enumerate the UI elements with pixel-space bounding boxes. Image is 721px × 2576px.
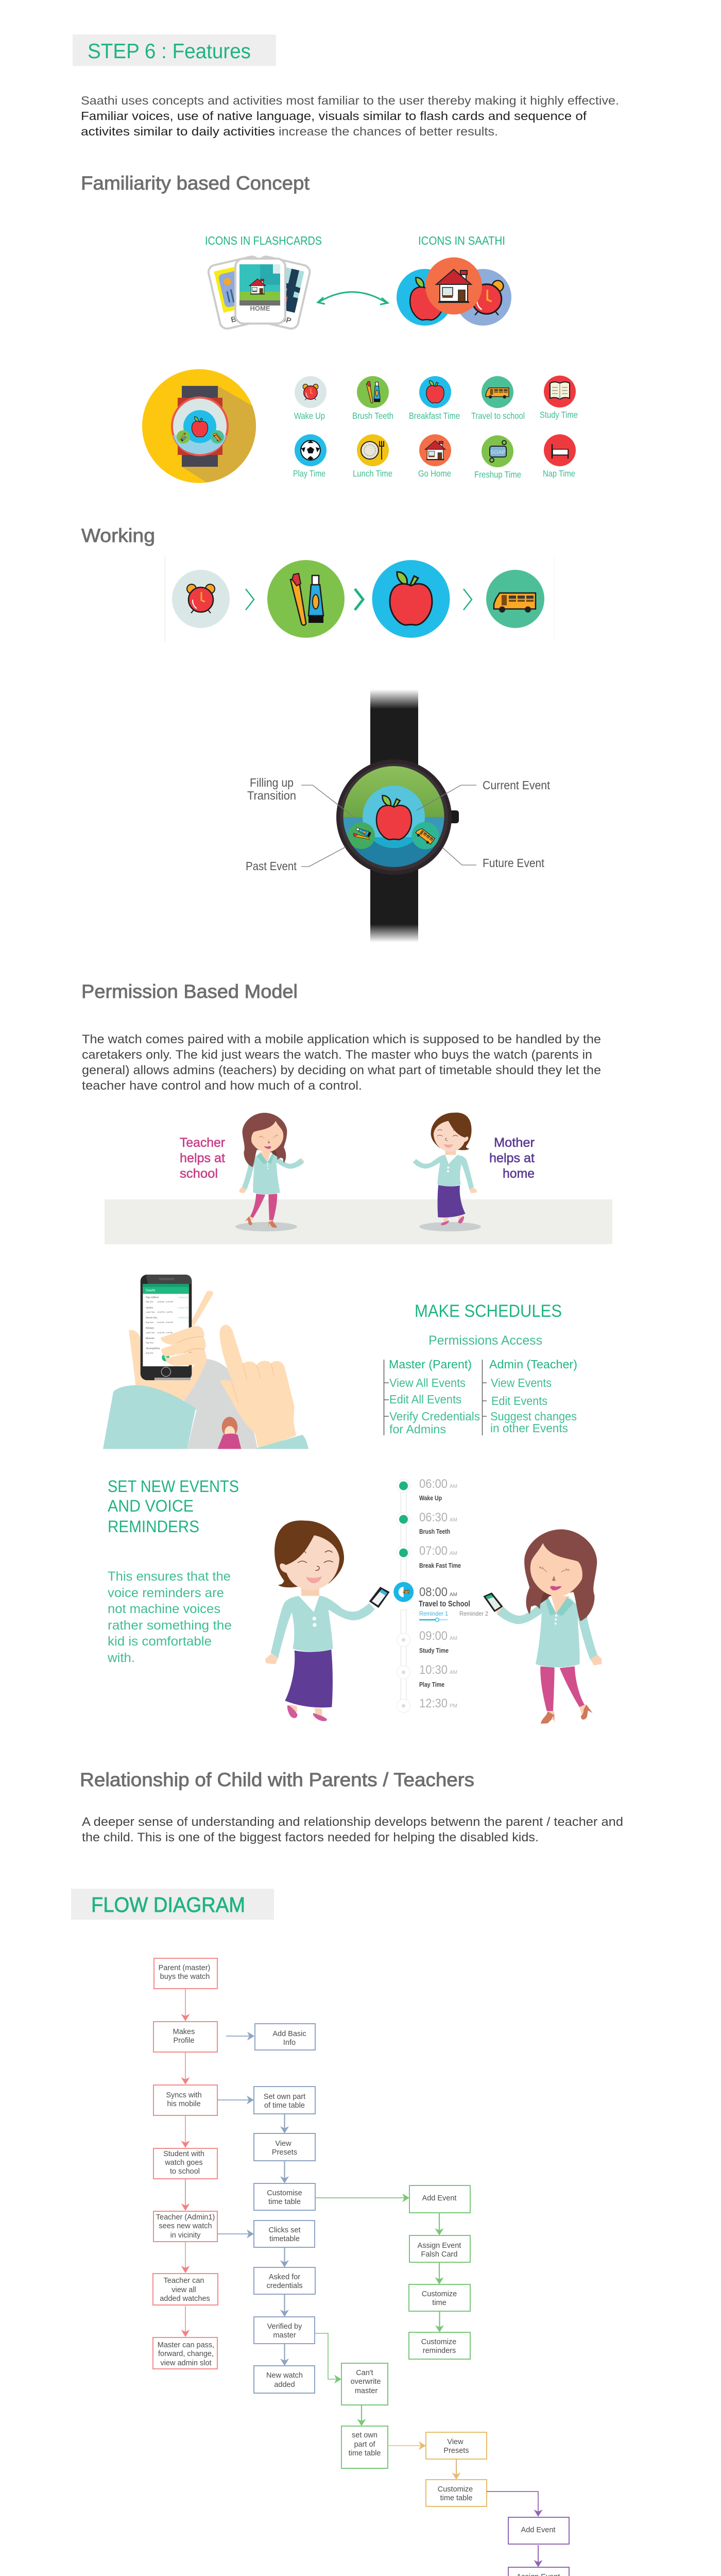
box: teacher views [153,2274,218,2305]
phone: Niranjan [146,1327,154,1329]
arrow [181,1989,190,2021]
box: set own part [341,2426,388,2468]
text: voice reminders explanation [107,1569,232,1665]
event: breakfast: AM [450,1551,457,1556]
intro paragraph [81,94,619,138]
phone: 12:00 PM - 1:00 PM [157,1311,173,1313]
label: teacher helps at school [180,1136,225,1181]
event: wake up: Wake Up [419,1495,442,1502]
label: icons in saathi: ICONS IN SAATHI [418,234,505,247]
box: set own part [254,2087,315,2114]
column: master: View All Events [389,1376,466,1389]
box: view presets [426,2432,487,2459]
box: assign event flash card: Assign Event [418,2242,461,2250]
box: customize reminders: Customize [421,2338,456,2346]
intro paragraph: Familiar voices, use of native language, visuals similar to flash cards and sequence of [81,109,587,123]
flow column: blue [218,2024,315,2393]
step: alarm clock [172,570,230,628]
box: parent buys: Parent (master) [159,1964,210,1972]
phone: Apurba [146,1306,153,1309]
box: add basic info [255,2024,315,2050]
box: parent buys [154,1958,217,1989]
smartwatch with callouts [246,689,551,942]
arrow [181,2052,190,2084]
callout: past event: Past Event [246,859,297,873]
flashcard: home: HOME [250,304,270,312]
phone: CONNECTED [178,1307,189,1309]
event: travel to school: Travel to School [419,1600,470,1608]
current node [393,1582,414,1602]
phone [141,1275,192,1380]
column: master [389,1358,480,1436]
intro paragraph: activites similar to daily activities [81,125,275,138]
box: set own part: part of [354,2441,376,2449]
chevron 2 [355,589,363,610]
arrow: makes profile to basic info [226,2032,254,2040]
step: brush teeth [267,560,345,638]
callout: filling up transition [247,776,296,802]
label: teacher helps at school: school [180,1166,218,1181]
icon: freshup time: Freshup Time [474,469,521,480]
text: voice reminders explanation: voice reminders are [108,1586,224,1600]
event: study time: Study Time [419,1647,449,1654]
event: wake up: AM [450,1484,457,1489]
icon: wake up [294,376,327,421]
event: travel to school [419,1585,488,1622]
phone: Bhasvati [146,1337,154,1340]
panel: teacher and mother [105,1112,612,1244]
rail [401,1486,406,1706]
text: voice reminders explanation: with. [107,1651,135,1665]
heading: set new events and voice reminders: SET NEW EVENTS [108,1477,239,1496]
arrow [435,2213,444,2235]
box: set own part: of time table [264,2102,305,2110]
event: travel to school: Reminder 2 [459,1610,488,1617]
icon: play time: Play Time [293,468,325,479]
callout: filling up transition: Transition [247,789,296,802]
box: new watch added: added [274,2381,295,2389]
left palm [129,1330,207,1400]
label: mother helps at home: Mother [494,1136,535,1150]
arrow: syncs to set own [218,2096,254,2104]
holding fingers [161,1291,213,1366]
label: mother helps at home: home [503,1166,535,1181]
box: customize time table: time table [440,2494,472,2502]
box: view presets: Presets [272,2148,297,2157]
column: master: Verify Credentials [389,1410,480,1423]
phone: 11:00 AM - 12:00 PM [157,1321,173,1324]
column: admin: in other Events [490,1421,568,1435]
box: asked for credentials [254,2267,315,2294]
relationship paragraph: the child. This is one of the biggest factors needed for helping the disabled kids. [82,1831,539,1844]
event: breakfast: 07:00 [419,1544,448,1558]
icon: brush teeth: Brush Teeth [352,411,393,421]
box: teacher sees: Teacher (Admin1) [156,2213,215,2222]
icon: lunch time: Lunch Time [353,468,392,479]
box: teacher views: view all [171,2286,196,2294]
arrow: customise to add event [315,2194,409,2202]
box: teacher views: Teacher can [164,2277,204,2285]
box: cant overwrite master: master [355,2387,377,2395]
box: cant overwrite master [341,2363,388,2405]
upcoming nodes [397,1633,410,1713]
arrow [181,2242,190,2273]
figure: mother with phone [265,1520,390,1721]
label: teacher helps at school: helps at [180,1151,225,1165]
icon: wake up: Wake Up [294,411,325,421]
arrow [181,2306,190,2337]
label: mother helps at home: helps at [489,1151,535,1165]
box: add event: Add Event [422,2194,456,2202]
icon: lunch time [353,434,392,479]
flow column: green master events [315,2185,470,2359]
event: 12:30: 12:30 [419,1697,448,1710]
heading: working: Working [81,525,155,546]
callout: current event: Current Event [483,778,551,792]
heading: set new events and voice reminders: AND VOICE [108,1497,194,1515]
icon: watch on yellow circle [142,369,256,483]
box: add event [508,2517,569,2544]
arrow [181,2179,190,2211]
arrow [280,2247,289,2267]
watch strap [370,689,418,942]
permission paragraph [82,1032,601,1093]
icon: nap time [543,434,576,479]
event: play time: Play Time [419,1681,444,1688]
phone: CONNECTED [178,1297,189,1299]
box: add basic info: Info [283,2039,296,2047]
box: makes profile: Profile [173,2037,195,2045]
box: set own part: set own [352,2431,377,2439]
flashcard: breakfast: BR [230,313,243,325]
event: study time: AM [450,1636,457,1641]
box: cant overwrite master: Can't [356,2369,373,2377]
event: breakfast [419,1544,461,1569]
event: brush teeth: Brush Teeth [419,1528,450,1535]
relationship paragraph [82,1815,623,1844]
left sleeve [103,1385,196,1449]
box: assign event flash card: Falsh Card [421,2250,457,2259]
box: clicks set timetable: Clicks set [268,2226,301,2234]
watch screen [340,766,448,868]
icon: brush teeth [352,376,393,421]
label: icons in flashcards: ICONS IN FLASHCARDS [205,234,322,247]
column: admin: Admin (Teacher) [489,1358,577,1371]
box: student: watch goes [164,2159,203,2167]
timeline [393,1477,488,1713]
watch crown [448,810,459,823]
event: play time: AM [450,1670,457,1675]
icon: breakfast time [409,376,460,421]
permission paragraph: caretakers only. The kid just wears the watch. The master who buys the watch (parents in [82,1048,592,1062]
box: syncs: Syncs with [166,2091,202,2099]
phone: Play Time [146,1321,153,1324]
icon: play time [293,434,327,479]
box: assign event flash card [409,2235,470,2262]
text: voice reminders explanation: not machine voices [108,1602,220,1616]
icon: travel to school: Travel to school [471,411,525,421]
phone: 12:00 PM - 1:00 PM [157,1332,173,1334]
box: clicks set timetable [254,2221,315,2247]
label: mother helps at home [489,1136,535,1181]
label: teacher helps at school: Teacher [180,1136,225,1150]
event: travel to school: AM [450,1592,457,1598]
heading: set new events and voice reminders [108,1477,239,1536]
box: set own part: Set own part [264,2093,305,2101]
flashcards illustration [207,255,311,330]
heading: permission based model: Permission Based Model [81,981,298,1002]
phone: Saathi [146,1289,156,1293]
event: brush teeth [419,1511,457,1535]
heading: relationship: Relationship of Child with Parents / Teachers [80,1769,474,1790]
step: apple [372,560,450,638]
relationship paragraph: A deeper sense of understanding and relationship develops betwenn the parent / teacher and [82,1815,623,1829]
flashcard: home [235,259,285,324]
event: travel to school: 08:00 [419,1585,448,1599]
phone: Play Time [146,1342,153,1344]
box: new watch added: New watch [266,2371,303,2380]
icon: travel to school [471,376,525,421]
callout: future event: Future Event [483,856,545,870]
arrow [280,2344,289,2366]
box: view presets: View [447,2438,464,2446]
box: teacher sees: in vicinity [170,2231,201,2240]
permission paragraph: teacher have control and how much of a control. [82,1079,362,1093]
box: view presets: Presets [443,2447,469,2455]
heading bar: flow diagram: FLOW DIAGRAM [91,1893,245,1917]
intro paragraph: increase the chances of better results. [279,125,498,138]
box: student: Student with [163,2150,204,2158]
box: clicks set timetable: timetable [269,2235,300,2243]
chevron 3 [464,589,472,610]
flow diagram [153,1958,569,2576]
step: school bus [486,570,544,628]
column: admin: Suggest changes [490,1410,577,1423]
arrow [388,2441,426,2450]
permission paragraph: The watch comes paired with a mobile application which is supposed to be handled by the [82,1032,601,1046]
figure: teacher with phone [483,1529,602,1724]
box: syncs: his mobile [167,2100,201,2108]
callout: filling up transition: Filling up [250,776,294,789]
box: makes profile: Makes [173,2028,195,2036]
box: teacher views: added watches [160,2295,210,2303]
box: verified by master: master [273,2331,296,2340]
box: parent buys: buys the watch [160,1973,210,1981]
box: teacher sees [153,2211,217,2242]
intro paragraph: Saathi uses concepts and activities most familiar to the user thereby making it highly effective. [81,94,619,107]
figure: teacher [239,1113,304,1228]
heading: make schedules: MAKE SCHEDULES [415,1301,562,1321]
icon grid: daily events [293,376,578,480]
figure: mother [413,1112,477,1225]
event: breakfast: Break Fast Time [419,1562,461,1569]
box: asked for credentials: Asked for [269,2273,300,2281]
column: master: for Admins [389,1422,446,1436]
icon: study time: Study Time [540,410,578,420]
phone: Lunch Time [146,1332,154,1334]
box: view presets: View [275,2140,291,2148]
heading bar: flow diagram [71,1889,274,1920]
box: customise time table: time table [268,2198,301,2206]
heading bar: step 6 [73,35,276,66]
box: add basic info: Add Basic [272,2030,306,2038]
watch case [336,759,452,875]
box: add event [409,2185,470,2213]
arrow [487,2492,543,2517]
box: master passes [153,2337,217,2369]
icon: double-headed arrow [318,292,388,304]
box: customise time table [254,2183,315,2210]
box: master passes: forward, change, [158,2350,214,2358]
box: master passes: view admin slot [160,2359,212,2367]
subheading: permissions access: Permissions Access [428,1333,542,1348]
arrow [181,2115,190,2148]
box: add event: Add Event [521,2526,555,2534]
flashcard: wake up [246,255,311,330]
flashcard: breakfast [207,255,272,330]
event: travel to school: Reminder 1 [419,1610,448,1617]
phone in mother's hand [369,1587,390,1608]
working sequence panel [165,556,554,641]
pointing hand [220,1325,296,1449]
box: syncs [153,2085,217,2115]
event: play time [419,1663,457,1688]
box: cant overwrite master: overwrite [351,2378,381,2386]
grey body [184,1359,258,1449]
icons in saathi illustration [397,258,511,326]
heading: set new events and voice reminders: REMINDERS [108,1517,199,1536]
text: voice reminders explanation: rather something the [108,1618,232,1633]
phone: Steven Dev [146,1316,158,1319]
heading: familiarity based concept: Familiarity based Concept [81,173,310,194]
teacher shadow [235,1222,297,1231]
arrow [452,2459,460,2480]
chevron 1 [246,589,254,610]
icon: study time [540,376,578,420]
box: verified by master: Verified by [267,2323,302,2331]
text: voice reminders explanation: kid is comfortable [108,1634,212,1649]
box: customize time table: Customize [438,2485,473,2494]
icon: breakfast time: Breakfast Time [409,411,460,421]
heading bar: step 6: STEP 6 : Features [88,39,251,63]
box: customize time [409,2284,470,2311]
box: customize time: Customize [422,2290,457,2298]
ground band [105,1199,612,1244]
phone: Play Time [146,1301,153,1303]
column: admin: Edit Events [491,1394,547,1408]
column: admin [489,1358,577,1435]
phone: Lunch Time [146,1311,154,1313]
box: makes profile [153,2022,217,2052]
box: customize reminders [409,2332,470,2359]
box: set own part: time table [349,2449,381,2458]
box: teacher sees: sees new watch [159,2222,212,2230]
box: new watch added [254,2366,315,2393]
arrow: teacher to clicks [218,2230,254,2238]
box: verified by master [254,2317,315,2344]
arrow [534,2545,543,2567]
callout lines [301,785,476,867]
permission paragraph: general) allows admins (teachers) by deciding on what part of timetable should they let the [82,1063,601,1077]
icon: nap time: Nap Time [543,468,575,479]
flow column: parent and teacher [153,1958,218,2369]
arrow [435,2312,444,2332]
icon: go home [418,434,451,479]
flow column: yellow [388,2432,487,2506]
phone: Play Time [146,1352,153,1354]
icon: freshup time: SOAP [490,449,506,455]
illustration: hands holding phone [103,1275,308,1449]
event: wake up: 06:00 [419,1477,448,1491]
box: customize time table [426,2480,487,2506]
arrow [280,2161,289,2183]
icon: go home: Go Home [418,468,451,479]
arrow [357,2405,366,2426]
column: admin: View Events [491,1376,552,1389]
arrow [435,2262,444,2284]
flashcard: wake up: UP [280,314,292,326]
box: master passes: Master can pass, [158,2341,214,2349]
flow column: purple [487,2492,569,2576]
arrow [280,2114,289,2133]
event: brush teeth: 06:30 [419,1511,448,1524]
column: master: Master (Parent) [389,1358,472,1371]
arrow: verified to cant overwrite [315,2333,341,2383]
event: play time: 10:30 [419,1663,448,1677]
box: asked for credentials: credentials [266,2282,303,2290]
flow column: green admin [315,2333,388,2468]
text: voice reminders explanation: This ensures that the [108,1569,231,1584]
phone: Himangshikha [146,1347,160,1350]
box: customize reminders: reminders [423,2347,456,2355]
small figure [218,1417,241,1449]
permissions table [384,1358,577,1436]
box: view presets [254,2133,315,2161]
phone in teacher's hand [483,1592,503,1612]
event: study time [419,1629,457,1654]
arrow [280,2294,289,2317]
event: 12:30: PM [450,1703,457,1709]
box: assign event flash card [508,2567,569,2576]
icon: freshup time [474,435,521,480]
box: customize time: time [432,2299,447,2307]
phone: 10:30 AM - 11:00 PM [157,1301,173,1303]
column: master: Edit All Events [389,1393,461,1406]
box: customise time table: Customise [267,2189,302,2197]
event: wake up [419,1477,457,1502]
event: study time: 09:00 [419,1629,448,1643]
phone: Puja Adhikari [146,1296,159,1299]
event: brush teeth: AM [450,1517,457,1523]
right sleeve [254,1435,308,1449]
box: student [153,2148,217,2179]
box: student: to school [170,2167,200,2176]
completed nodes [397,1479,410,1560]
mother shadow [419,1222,481,1231]
phone: CONNECTED [178,1317,189,1319]
